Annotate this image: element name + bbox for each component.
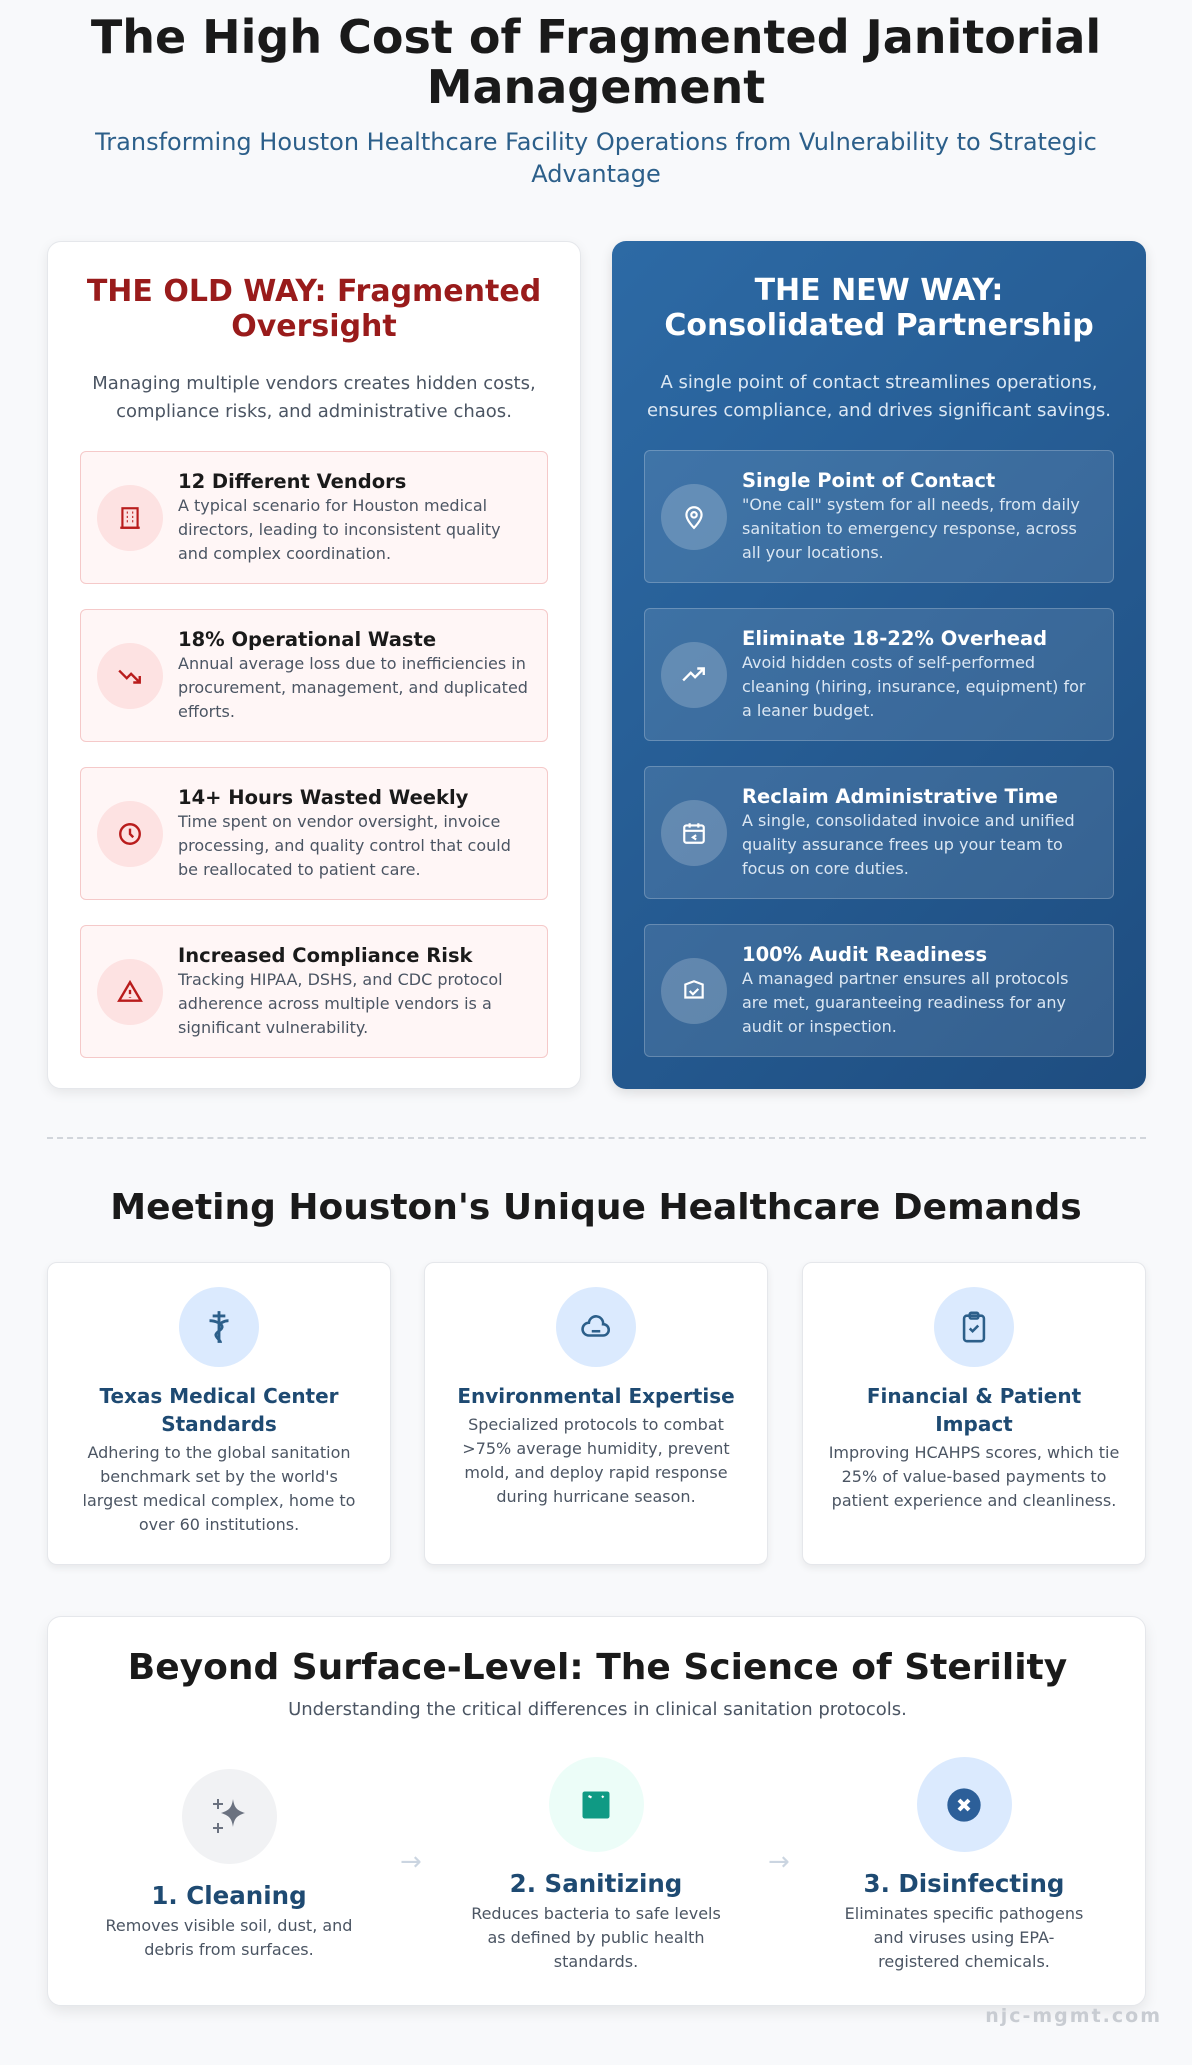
heading: new way: [664, 273, 1094, 343]
step: cleaning: Removes visible soil, dust, and debris from surfaces.: [106, 1916, 352, 1959]
item: compliance risk: Tracking HIPAA, DSHS, and CDC protocol adherence across multiple vendors is a significant vulnerability.: [178, 970, 503, 1036]
text: old way description: Managing multiple vendors creates hidden costs,: [92, 373, 536, 394]
item: compliance risk: [80, 925, 548, 1058]
card: financial: Financial & Patient: [867, 1384, 1081, 1408]
item: reclaim time: A single, consolidated invoice and unified quality assurance frees up your team to focus on core duties.: [742, 810, 1075, 878]
panel: old way: [47, 241, 581, 1089]
item: reclaim time: Reclaim Administrative Time: [742, 784, 1058, 808]
item: audit readiness: [644, 924, 1114, 1057]
item: 12 vendors: [80, 451, 548, 584]
item: eliminate overhead: Eliminate 18-22% Overhead: [742, 626, 1047, 650]
icon: medical: [179, 1287, 259, 1367]
text: old way description: compliance risks, and administrative chaos.: [116, 401, 512, 422]
card: environmental: Specialized protocols to combat >75% average humidity, prevent mold, and deploy rapid response during hurricane season.: [462, 1415, 730, 1506]
item: 18% waste: Annual average loss due to inefficiencies in procurement, management, and duplicated efforts.: [178, 654, 528, 720]
card: Texas Medical Center: [47, 1262, 391, 1565]
step: disinfecting: Eliminates specific pathogens and viruses using EPA-registered chemicals.: [845, 1904, 1083, 1971]
item: audit readiness: A managed partner ensures all protocols are met, guaranteeing readiness for any audit or inspection.: [742, 968, 1068, 1036]
title: The High Cost of Fragmented Janitorial: [91, 10, 1101, 64]
title: [91, 10, 1101, 114]
heading: old way: Oversight: [231, 309, 397, 344]
step: disinfecting: 3. Disinfecting: [864, 1869, 1064, 1898]
panel: science of sterility: [47, 1616, 1146, 2006]
arrow: →: [400, 1847, 422, 1877]
step: cleaning: 1. Cleaning: [151, 1881, 307, 1910]
item: single point: [644, 450, 1114, 583]
item: 18% waste: 18% Operational Waste: [178, 628, 436, 650]
item: single point: Single Point of Contact: [742, 468, 995, 492]
text: old way description: [92, 373, 536, 422]
text: new way description: [647, 372, 1111, 421]
item: 12 vendors: 12 Different Vendors: [178, 470, 406, 492]
item: 14+ hours: 14+ Hours Wasted Weekly: [178, 786, 468, 808]
icon: cloud: [556, 1287, 636, 1367]
item: reclaim time: [644, 766, 1114, 899]
arrow: →: [768, 1847, 790, 1877]
card: Texas Medical Center: Adhering to the global sanitation benchmark set by the world's largest medical complex, home to over 60 institutions.: [83, 1443, 355, 1534]
card: Texas Medical Center: Standards: [161, 1412, 277, 1436]
card: financial: [802, 1262, 1146, 1565]
heading: sterility: Beyond Surface-Level: The Science of Sterility: [128, 1647, 1067, 1688]
heading: old way: [87, 274, 541, 344]
heading: new way: Consolidated Partnership: [664, 308, 1094, 343]
item: eliminate overhead: Avoid hidden costs of self-performed cleaning (hiring, insurance, equipment) for a leaner budget.: [742, 652, 1086, 720]
text: new way description: A single point of contact streamlines operations,: [660, 372, 1098, 393]
item: single point: "One call" system for all needs, from daily sanitation to emergency response, across all your locations.: [742, 494, 1080, 562]
subtitle: Transforming Houston Healthcare Facility Operations from Vulnerability to Strategic Advantage: [95, 128, 1097, 188]
panel: new way: [612, 241, 1146, 1089]
heading: new way: THE NEW WAY:: [755, 273, 1003, 308]
item: compliance risk: Increased Compliance Risk: [178, 944, 473, 966]
item: 12 vendors: A typical scenario for Houston medical directors, leading to inconsistent quality and complex coordination.: [178, 496, 501, 562]
subtitle: sterility: Understanding the critical differences in clinical sanitation protocols.: [288, 1699, 907, 1720]
heading: Houston demands: Meeting Houston's Unique Healthcare Demands: [110, 1187, 1082, 1228]
item: audit readiness: 100% Audit Readiness: [742, 942, 987, 966]
step: sanitizing: 2. Sanitizing: [510, 1869, 682, 1898]
item: 14+ hours: [80, 767, 548, 900]
footer: watermark: njc-mgmt.com: [985, 2005, 1162, 2027]
icon: clipboard: [934, 1287, 1014, 1367]
card: environmental: Environmental Expertise: [457, 1384, 735, 1408]
item: eliminate overhead: [644, 608, 1114, 741]
step: cleaning: [106, 1769, 352, 1959]
step: disinfecting: [845, 1757, 1083, 1971]
item: 18% waste: [80, 609, 548, 742]
card: financial: Improving HCAHPS scores, which tie 25% of value-based payments to patient experience and cleanliness.: [829, 1443, 1119, 1510]
step: sanitizing: [471, 1757, 721, 1971]
card: Texas Medical Center: Texas Medical Center: [99, 1384, 339, 1408]
item: 14+ hours: Time spent on vendor oversight, invoice processing, and quality control that could be reallocated to patient care.: [178, 812, 511, 878]
title: Management: [427, 60, 765, 114]
text: new way description: ensures compliance, and drives significant savings.: [647, 400, 1111, 421]
card: environmental: [424, 1262, 768, 1565]
card: financial: Impact: [935, 1412, 1013, 1436]
step: sanitizing: Reduces bacteria to safe levels as defined by public health standards.: [471, 1904, 721, 1971]
heading: old way: THE OLD WAY: Fragmented: [87, 274, 541, 309]
